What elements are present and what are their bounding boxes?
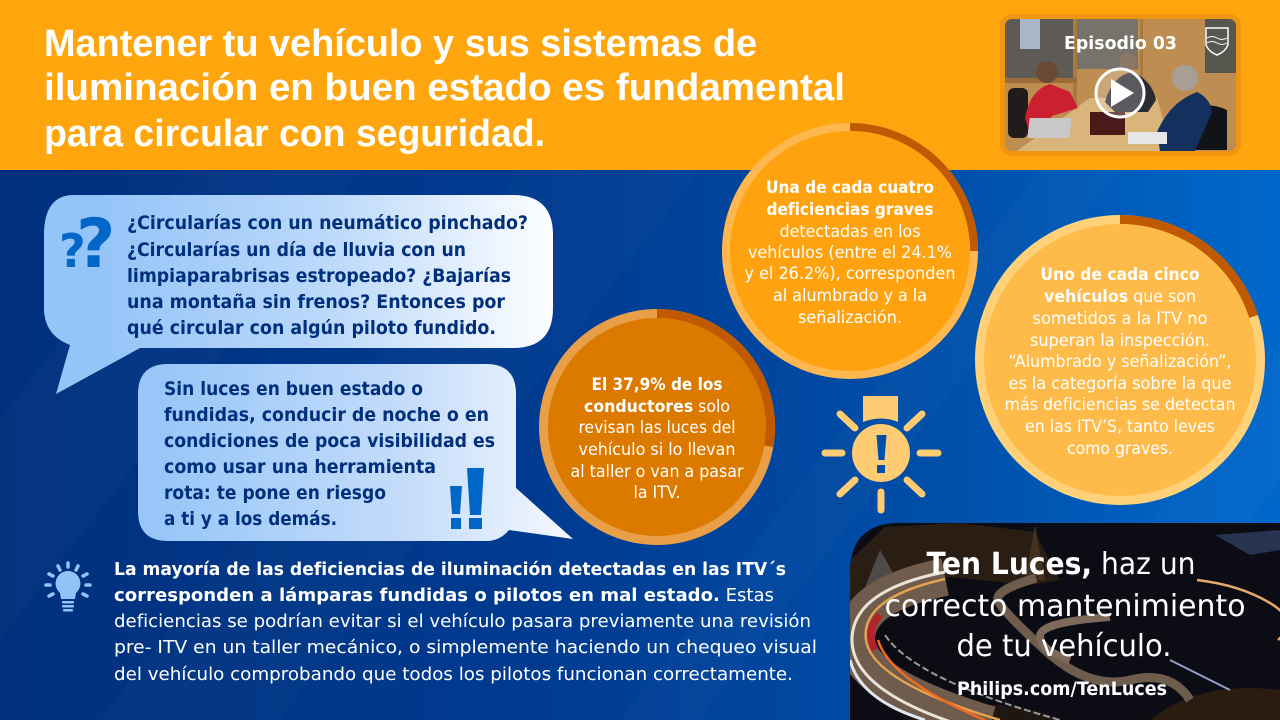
icon: light bulb xyxy=(46,563,90,612)
circle: 37,9%: vehículo si lo llevan xyxy=(578,440,736,459)
circle: uno de cada cinco: “Alumbrado y señalización”, xyxy=(1008,352,1232,371)
body text: most deficiencies: pre- ITV en un taller mecánico, o simplemente haciendo un chequeo visual xyxy=(114,637,817,658)
title: para circular con seguridad. xyxy=(44,113,545,155)
circle: 37,9%: El 37,9% de los xyxy=(592,375,723,394)
promo text: correcto mantenimiento xyxy=(884,589,1246,624)
circle: una de cada cuatro: Una de cada cuatro xyxy=(766,178,934,197)
text: warning: como usar una herramienta xyxy=(164,456,436,478)
icon: question marks: ? xyxy=(59,224,86,278)
text: warning: rota: te pone en riesgo xyxy=(164,482,386,504)
icon: question marks xyxy=(59,205,115,284)
video thumbnail: Episodio 03 xyxy=(1064,33,1177,54)
text: questions: limpiaparabrisas estropeado? ¿Bajarías xyxy=(127,265,511,287)
circle: una de cada cuatro: deficiencias graves xyxy=(766,200,934,219)
circle: uno de cada cinco: en las ITV’S, tanto leves xyxy=(1025,417,1215,436)
icon: exclamation marks xyxy=(450,468,484,529)
circle: uno de cada cinco xyxy=(975,215,1265,505)
circle: una de cada cuatro: y el 26.2%), corresponden xyxy=(744,264,956,283)
circle: uno de cada cinco: como graves. xyxy=(1067,439,1173,458)
circle: 37,9%: conductores solo xyxy=(584,397,730,416)
icon: question marks: ? xyxy=(76,205,115,284)
text: warning: condiciones de poca visibilidad es xyxy=(164,430,495,452)
text: questions: qué circular con algún piloto fundido. xyxy=(127,317,496,339)
promo text: de tu vehículo. xyxy=(956,629,1172,664)
text: warning: Sin luces en buen estado o xyxy=(164,378,423,400)
text: questions: una montaña sin frenos? Entonces por xyxy=(127,291,506,313)
circle: una de cada cuatro xyxy=(722,123,978,379)
promo photo panel xyxy=(850,523,1280,720)
circle: uno de cada cinco: más deficiencias se detectan xyxy=(1004,395,1236,414)
video thumbnail xyxy=(1000,14,1241,156)
circle: uno de cada cinco: Uno de cada cinco xyxy=(1040,265,1200,284)
text: warning: a ti y a los demás. xyxy=(164,508,337,530)
circle: uno de cada cinco: vehículos que son xyxy=(1044,287,1196,306)
body text: most deficiencies: deficiencias se podrían evitar si el vehículo pasara previamente una revisión xyxy=(114,611,811,632)
circle: uno de cada cinco: superan la inspección. xyxy=(1030,331,1210,350)
circle: uno de cada cinco: es la categoría sobre la que xyxy=(1008,374,1232,393)
title xyxy=(44,23,845,155)
circle: uno de cada cinco: sometidos a la ITV no xyxy=(1032,309,1208,328)
circle: una de cada cuatro: señalización. xyxy=(798,308,902,327)
body text: most deficiencies: del vehículo comprobando que todos los pilotos funcionan correctamente. xyxy=(114,664,793,685)
circle: 37,9%: la ITV. xyxy=(634,483,680,502)
circle: 37,9%: revisan las luces del xyxy=(578,418,736,437)
text: questions xyxy=(127,212,528,339)
header band xyxy=(0,0,1280,170)
promo text xyxy=(884,547,1246,700)
promo text: Philips.com/TenLuces xyxy=(957,678,1167,700)
circle: 37,9% xyxy=(539,309,775,545)
text: warning xyxy=(164,378,495,530)
speech bubble: questions xyxy=(44,195,553,394)
circle: una de cada cuatro: detectadas en los xyxy=(780,222,920,241)
body text: most deficiencies: corresponden a lámparas fundidas o pilotos en mal estado. Estas xyxy=(114,585,774,606)
text: warning: fundidas, conducir de noche o en xyxy=(164,404,489,426)
body text: most deficiencies xyxy=(114,559,817,685)
speech bubble: warning xyxy=(138,364,573,541)
text: questions: ¿Circularías con un neumático pinchado? xyxy=(127,212,528,234)
circle: una de cada cuatro: vehículos (entre el 24.1% xyxy=(748,243,952,262)
text: questions: ¿Circularías un día de lluvia con un xyxy=(127,239,466,261)
icon: warning light xyxy=(825,396,938,510)
title: iluminación en buen estado es fundamental xyxy=(44,67,845,109)
promo text: Ten Luces, haz un xyxy=(926,547,1196,582)
body text: most deficiencies: La mayoría de las deficiencias de iluminación detectadas en las ITV´s xyxy=(114,559,786,580)
light trails: highway xyxy=(850,572,1280,720)
circle: 37,9%: al taller o van a pasar xyxy=(570,462,744,481)
circle: una de cada cuatro: al alumbrado y a la xyxy=(773,286,927,305)
background xyxy=(0,170,1280,720)
title: Mantener tu vehículo y sus sistemas de xyxy=(44,23,757,65)
